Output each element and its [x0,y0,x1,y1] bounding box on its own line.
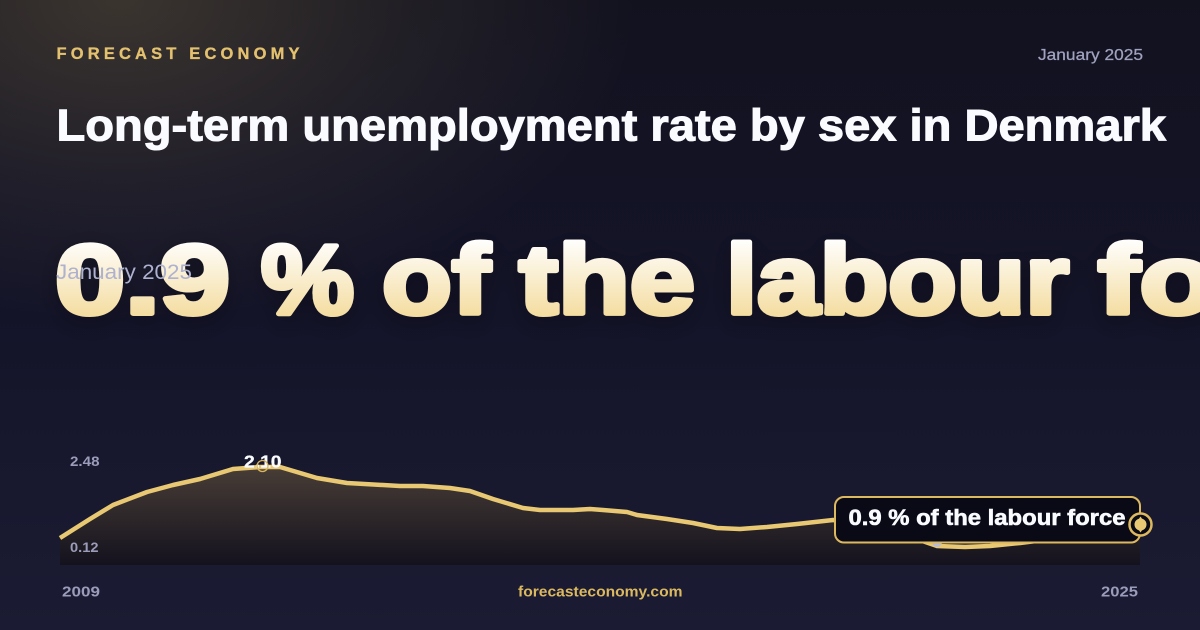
headline value [55,224,1200,334]
date top right: January 2025 [1038,47,1143,64]
x axis start year: 2009 [62,584,100,600]
overlapping date label: January 2025 [56,261,192,284]
axis min label: 0.12 [70,540,98,555]
low point marker [932,537,942,547]
line chart [60,452,1152,565]
headline value: % [261,224,354,334]
headline value: the [519,224,695,334]
axis max label: 2.48 [70,454,100,469]
brand label: FORECAST ECONOMY [56,45,300,63]
end point marker [1130,514,1152,536]
title: Long-term unemployment rate by sex in Denmark [56,102,1166,150]
callout: 0.9 % of the labour force [848,505,1126,530]
headline value: of [382,224,490,334]
callout [835,497,1140,542]
x axis end year: 2025 [1101,584,1138,600]
headline value: labour [726,224,1069,334]
peak marker [257,460,268,472]
chart area fill [60,467,1140,565]
chart line [60,467,1140,547]
peak value label: 2.10 [244,452,282,472]
source url: forecasteconomy.com [518,584,682,600]
headline value: 0.9 [55,224,230,334]
